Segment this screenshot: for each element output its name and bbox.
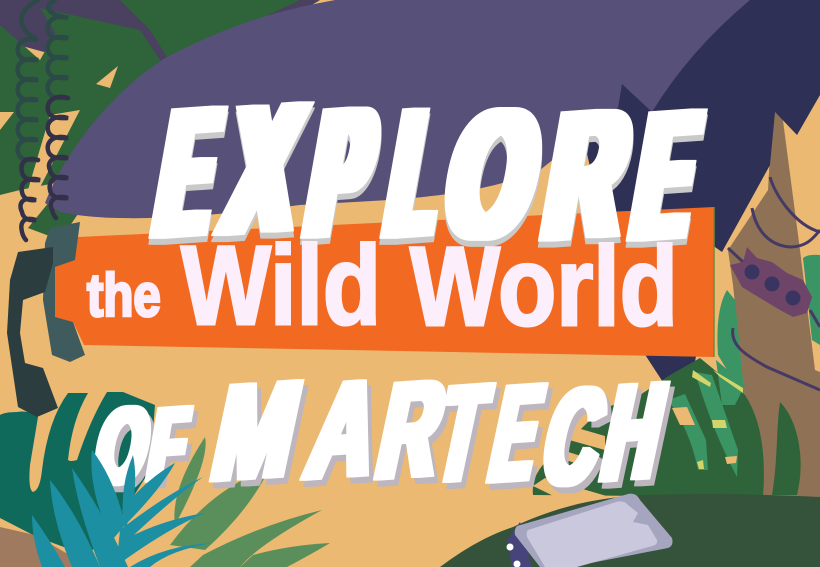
subtitle: the Wild World: Wild bbox=[181, 224, 381, 349]
title: OF MARTECH bbox=[88, 351, 680, 520]
title fill: R bbox=[534, 71, 642, 278]
title shadow: M bbox=[206, 358, 315, 515]
title fill: E bbox=[146, 70, 230, 275]
title shadow: H bbox=[596, 361, 680, 515]
title shadow bbox=[146, 72, 710, 284]
subtitle: the Wild World bbox=[87, 224, 678, 350]
starfish cluster bbox=[730, 247, 812, 317]
subtitle: the Wild World: World bbox=[410, 225, 678, 350]
title fill: F bbox=[142, 388, 195, 502]
title shadow: E bbox=[484, 362, 558, 516]
banner shadow edge bbox=[713, 207, 715, 357]
title fill: E bbox=[480, 356, 554, 510]
title shadow: E bbox=[623, 78, 710, 284]
ground hill bbox=[440, 494, 820, 567]
vines bbox=[728, 177, 820, 390]
title fill: O bbox=[88, 384, 158, 507]
title fill: X bbox=[214, 66, 314, 272]
title shadow: O bbox=[92, 390, 162, 513]
title shadow: R bbox=[371, 358, 460, 513]
fern tips overlapping the O bbox=[91, 450, 175, 540]
title shadow: L bbox=[377, 77, 456, 281]
title shadow: F bbox=[146, 394, 199, 508]
telephone cords bbox=[18, 0, 68, 240]
title fill: E bbox=[623, 72, 710, 278]
title shadow: R bbox=[534, 77, 642, 284]
title shadow: T bbox=[430, 363, 502, 517]
title shadow: C bbox=[536, 366, 620, 520]
title fill: C bbox=[532, 360, 616, 514]
title fill: T bbox=[426, 357, 498, 511]
tree trunk bbox=[728, 111, 820, 497]
blue palm fern bbox=[32, 450, 213, 567]
banner bbox=[53, 207, 714, 357]
title shadow: O bbox=[434, 76, 553, 284]
tablet device with eyes bbox=[506, 494, 672, 567]
title fill: M bbox=[202, 352, 311, 509]
title fill: R bbox=[367, 352, 456, 507]
bottom-left brown patch bbox=[0, 527, 90, 567]
title fill: A bbox=[297, 351, 392, 507]
lower-right foliage bbox=[533, 290, 801, 504]
title fill bbox=[88, 351, 676, 514]
title shadow: A bbox=[301, 357, 396, 513]
title shadow: E bbox=[146, 76, 230, 281]
title: EXPLORE bbox=[146, 66, 710, 284]
telephone handset bbox=[7, 222, 85, 417]
title shadow: P bbox=[297, 75, 387, 281]
purple canopy leaf bbox=[45, 0, 750, 218]
green palm leaves bbox=[170, 437, 330, 567]
top-left jungle foliage bbox=[0, 0, 320, 240]
title fill: P bbox=[297, 69, 387, 275]
title fill bbox=[146, 66, 710, 278]
teal leaf right of the trunk bbox=[803, 255, 820, 345]
subtitle: the Wild World: the bbox=[87, 261, 161, 329]
title shadow bbox=[92, 357, 680, 520]
lower-left monstera leaf bbox=[0, 392, 155, 553]
title fill: H bbox=[592, 355, 676, 509]
title shadow: X bbox=[214, 72, 314, 278]
title fill: L bbox=[377, 71, 456, 275]
navy canopy bbox=[580, 0, 820, 252]
title fill: O bbox=[434, 70, 553, 278]
